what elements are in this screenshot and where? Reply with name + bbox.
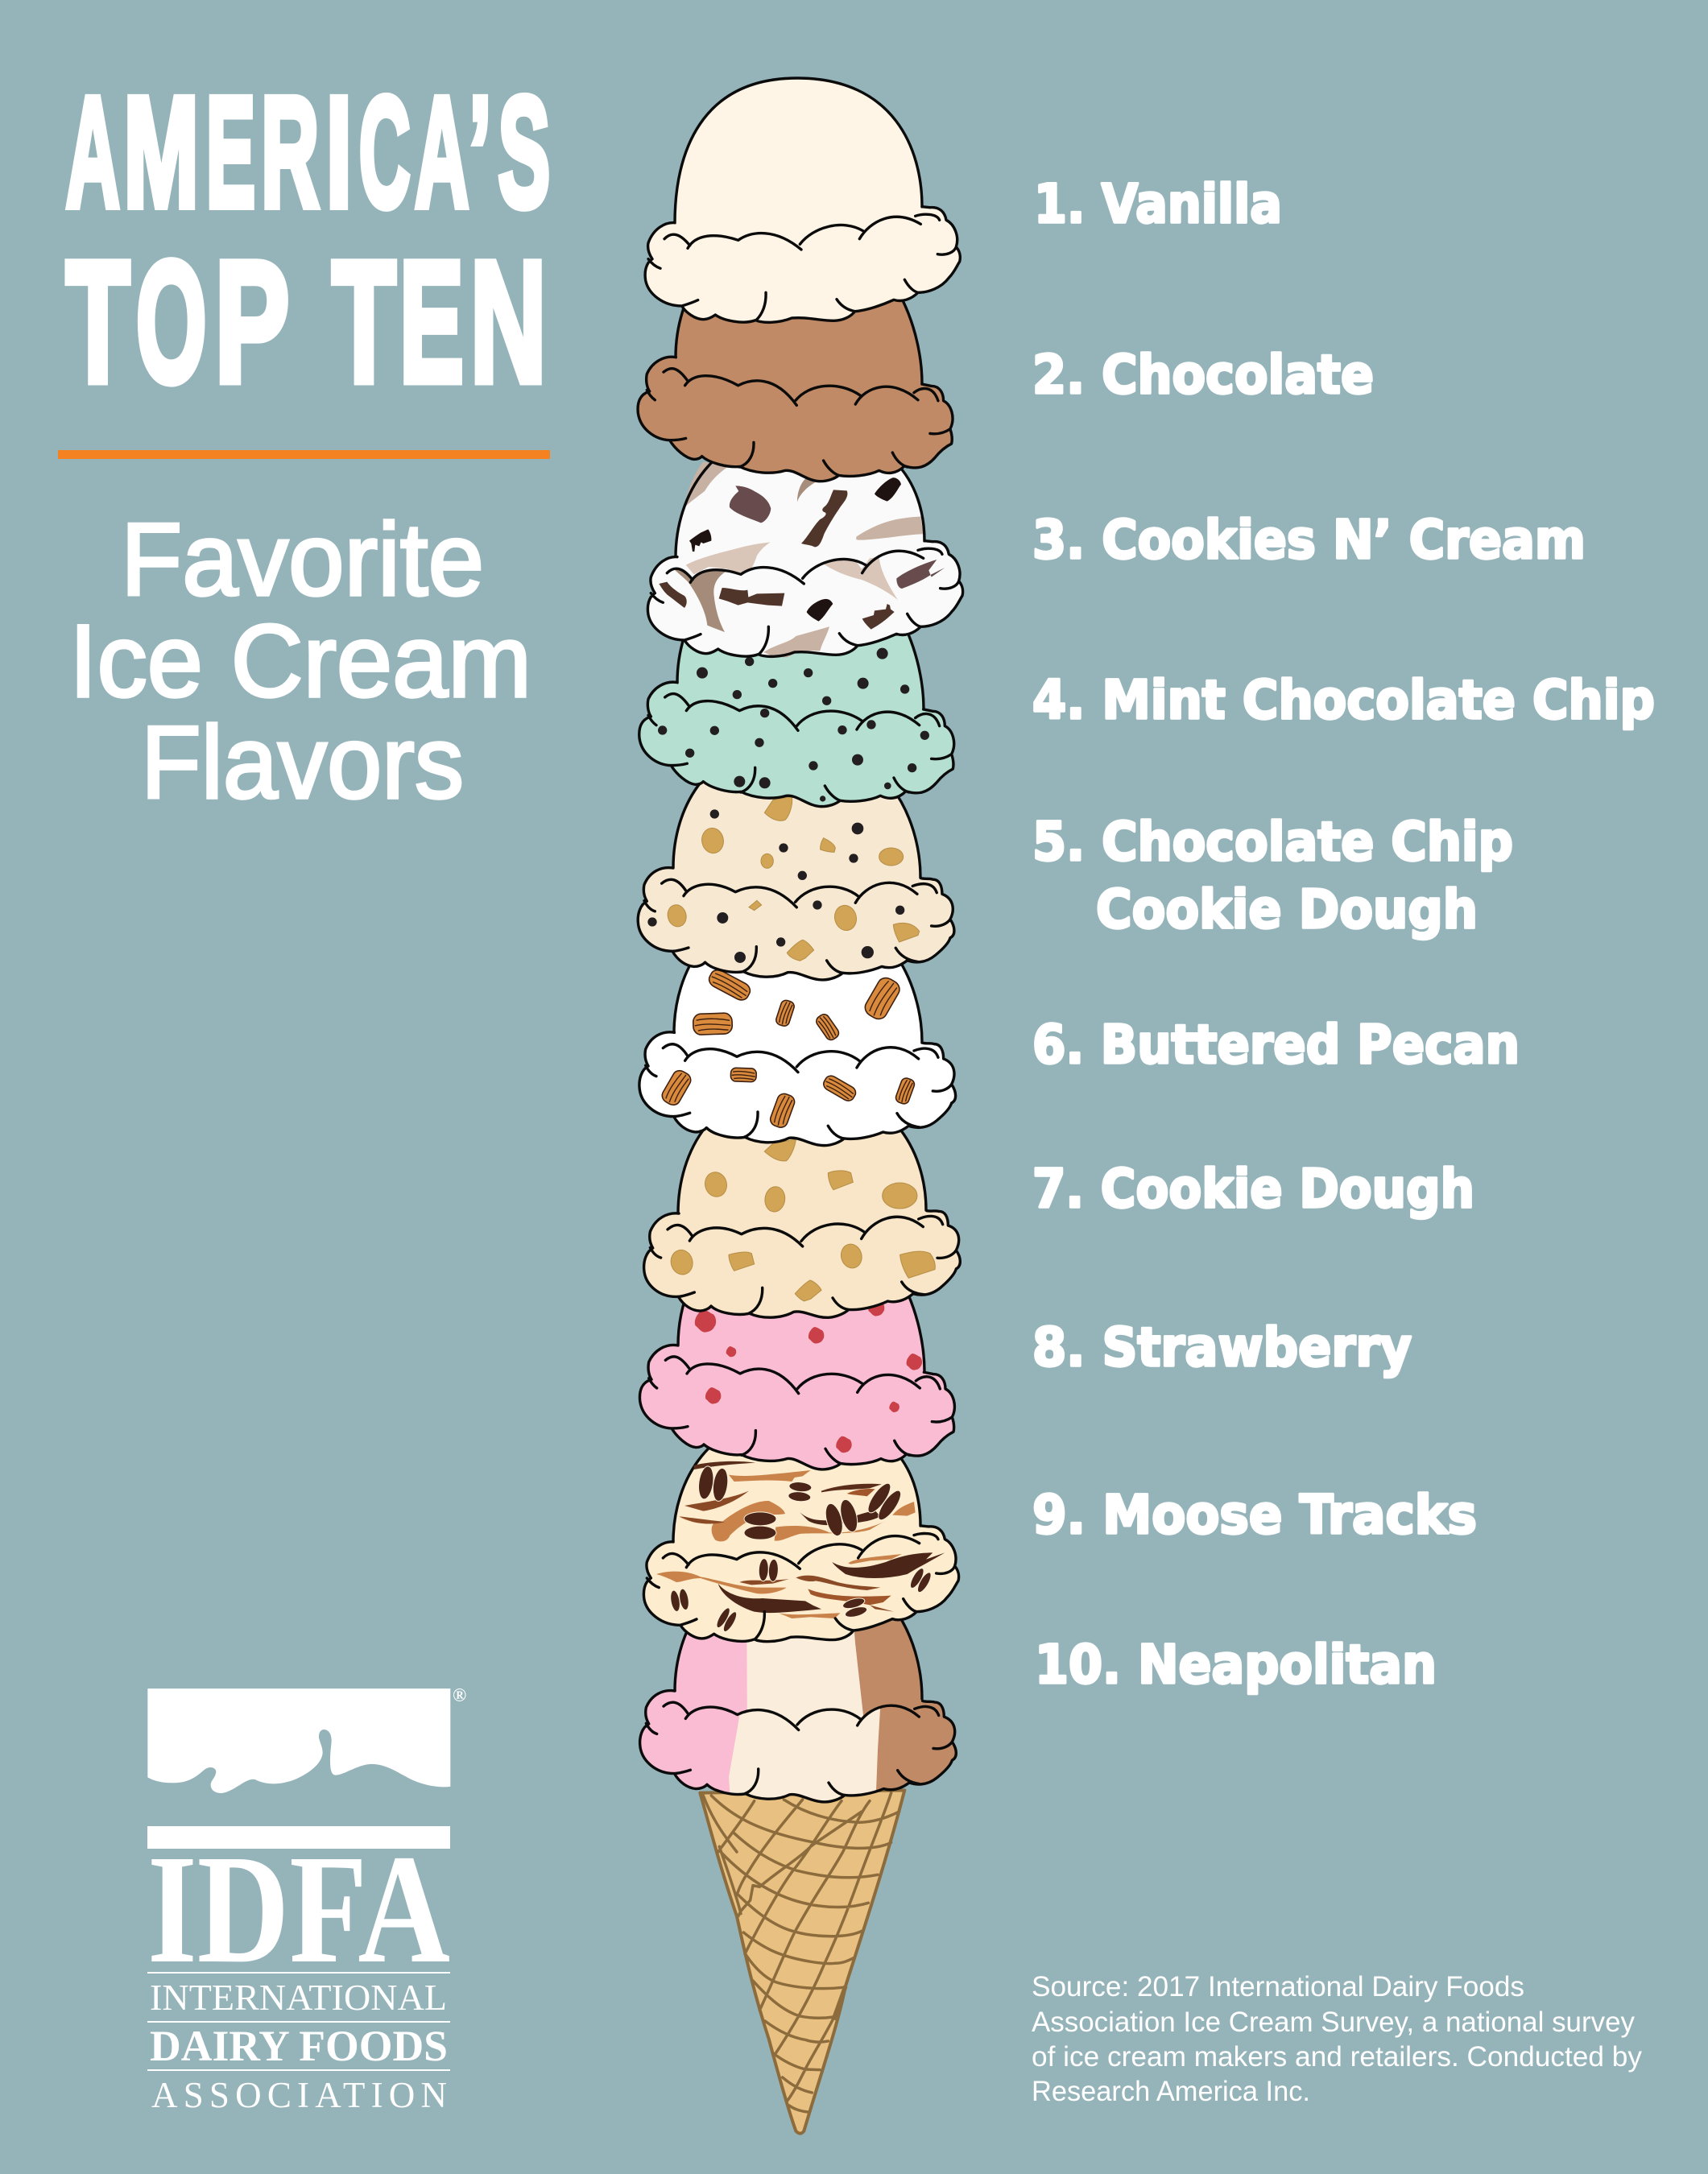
flavor 9: 9. Moose Tracks xyxy=(1032,1484,1477,1546)
title: America's Top Ten: A xyxy=(66,64,120,240)
title: America's Top Ten: N xyxy=(470,225,546,419)
orange divider bar xyxy=(58,450,550,459)
scoop 1: Vanilla xyxy=(645,78,960,322)
scoop 5: Chocolate Chip Cookie Dough xyxy=(638,741,954,980)
flavor 8: 8. Strawberry xyxy=(1032,1316,1412,1378)
IDFA logo: ASSOCIATION xyxy=(151,2075,447,2115)
subtitle: Favorite Ice Cream Flavors: Flavors xyxy=(141,705,464,820)
title: America's Top Ten: ’ xyxy=(469,64,491,240)
scoop 6: Buttered Pecan xyxy=(639,904,956,1146)
IDFA logo xyxy=(147,1685,466,2115)
flavor 5: Cookie Dough xyxy=(1096,878,1478,940)
scoop 8: Strawberry xyxy=(639,1216,954,1469)
subtitle: Favorite Ice Cream Flavors: Ice Cream xyxy=(69,604,531,719)
title: America's Top Ten: T xyxy=(332,225,396,419)
subtitle: Favorite Ice Cream Flavors xyxy=(69,502,531,820)
IDFA logo: ® xyxy=(453,1685,466,1705)
title: America's Top Ten xyxy=(66,64,550,419)
title: America's Top Ten: P xyxy=(215,225,287,419)
source note: Research America Inc. xyxy=(1032,2076,1310,2107)
IDFA logo: INTERNATIONAL xyxy=(150,1977,447,2018)
flavor 7: 7. Cookie Dough xyxy=(1032,1158,1474,1220)
title: America's Top Ten: M xyxy=(124,64,199,240)
waffle cone xyxy=(700,1790,904,2134)
logo: IDFA wordmark: IDFA xyxy=(147,1822,450,1995)
flavor 3: 3. Cookies N’ Cream xyxy=(1032,509,1586,571)
title: America's Top Ten: I xyxy=(326,64,352,240)
flavor 5 xyxy=(1032,811,1513,940)
logo: dripping cream block xyxy=(147,1688,450,1793)
title: America's Top Ten: E xyxy=(399,225,464,419)
title: America's Top Ten: R xyxy=(261,64,319,240)
scoop 2: Chocolate xyxy=(638,229,953,482)
flavor 5: 5. Chocolate Chip xyxy=(1032,811,1513,873)
title: America's Top Ten: C xyxy=(359,64,410,240)
title: America's Top Ten: E xyxy=(206,64,255,240)
source note: Source: 2017 International Dairy Foods xyxy=(1032,1971,1524,2002)
source note: Association Ice Cream Survey, a national survey xyxy=(1032,2007,1635,2038)
title: America's Top Ten: T xyxy=(66,225,130,419)
scoop 10: Neapolitan xyxy=(638,1620,957,1804)
flavor 4: 4. Mint Chocolate Chip xyxy=(1032,669,1655,731)
source note xyxy=(1032,1971,1643,2107)
flavor 6: 6. Buttered Pecan xyxy=(1032,1014,1520,1076)
ranked flavor list xyxy=(1032,173,1655,1696)
title: America's Top Ten: O xyxy=(136,225,207,419)
flavor 10: 10. Neapolitan xyxy=(1035,1634,1437,1696)
flavor 1: 1. Vanilla xyxy=(1034,173,1282,235)
title: America's Top Ten: A xyxy=(415,64,469,240)
flavor 2: 2. Chocolate xyxy=(1032,344,1374,406)
subtitle: Favorite Ice Cream Flavors: Favorite xyxy=(121,502,484,618)
infographic canvas: S xyxy=(498,64,550,240)
scoop 3: Cookies N' Cream xyxy=(647,428,963,658)
ice cream cone stack illustration xyxy=(628,78,974,2134)
scoop 4: Mint Chocolate Chip xyxy=(639,554,954,807)
source note: of ice cream makers and retailers. Conducted by xyxy=(1032,2041,1643,2073)
IDFA logo: DAIRY FOODS xyxy=(150,2022,448,2070)
scoop 7: Cookie Dough xyxy=(644,1085,960,1327)
scoop 9: Moose Tracks xyxy=(643,1415,959,1642)
